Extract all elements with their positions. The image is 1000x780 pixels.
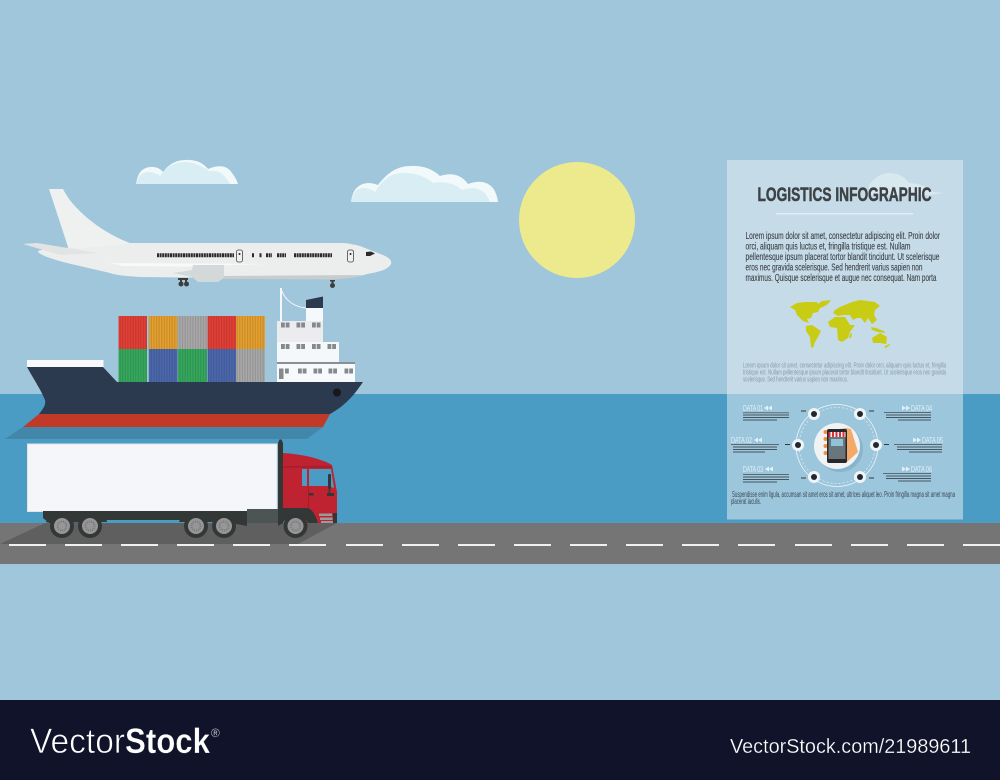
cabin windows: [281, 325, 353, 371]
airplane: [23, 189, 391, 288]
hand: [827, 428, 858, 463]
data 02: [731, 435, 779, 452]
title: LOGISTICS INFOGRAPHIC: [758, 184, 932, 206]
cab lower: [278, 508, 318, 526]
mirror: [309, 474, 334, 496]
data 01: DATA 01: [743, 403, 763, 413]
sea: [0, 394, 1000, 524]
engine: [173, 265, 224, 282]
second paragraph: [743, 362, 946, 384]
rear landing gear: [178, 278, 189, 286]
tail fin: [49, 189, 140, 255]
data 03: DATA 03: [743, 464, 763, 474]
node: [808, 408, 820, 420]
container top row: [118, 316, 265, 349]
node: [808, 471, 820, 483]
data 05: [894, 435, 943, 452]
truck: [28, 440, 337, 538]
panel background lower: [727, 394, 963, 520]
porthole: [333, 388, 341, 396]
funnel: [306, 296, 323, 308]
cab windows: [302, 469, 334, 488]
nodes: [792, 408, 882, 483]
door rear: [236, 250, 242, 262]
footer logo: vector: Vector: [30, 722, 125, 761]
chassis: [43, 511, 247, 526]
phone: [827, 429, 847, 463]
node: [854, 408, 866, 420]
mast: [281, 288, 306, 321]
node: [870, 439, 882, 451]
containers: [118, 316, 265, 382]
cockpit window: [366, 252, 375, 256]
intro paragraph: [746, 230, 940, 284]
belly shade: [217, 275, 363, 280]
door line: [307, 487, 310, 510]
node: [792, 439, 804, 451]
circular diagram: [785, 404, 889, 486]
footer id: VectorStock.com/21989611: [730, 736, 971, 758]
truck shadow: [0, 523, 337, 544]
footer bar: [0, 700, 1000, 780]
front landing gear: [330, 280, 335, 288]
data 03: [743, 464, 789, 482]
wheel 5: [284, 514, 308, 538]
data 06: DATA 06: [911, 464, 932, 474]
ship shadow on water: [5, 427, 323, 439]
panel: logistics infographic: [727, 160, 963, 520]
data 04: [884, 403, 932, 420]
road: [0, 523, 1000, 564]
cloud: small: [136, 160, 238, 184]
node: [854, 471, 866, 483]
data 02: DATA 02: [731, 435, 752, 445]
data labels: [731, 403, 943, 482]
wheels: [46, 513, 308, 538]
bow deck: [27, 360, 104, 367]
superstructure: [277, 308, 355, 382]
door front: [348, 250, 354, 262]
data 06: [883, 464, 932, 482]
world map: [790, 300, 890, 348]
windows mid: [252, 253, 332, 257]
wheel 3: [184, 514, 208, 538]
cab: [283, 453, 337, 523]
storage box: [247, 509, 278, 523]
cab roof line: [283, 466, 332, 468]
wheel arches: [46, 513, 107, 523]
awning: [828, 432, 846, 437]
footer logo: [30, 722, 220, 761]
disc shadow: [817, 426, 863, 472]
container bottom row: [118, 349, 265, 382]
windows rear: [157, 253, 234, 257]
ring: [796, 404, 878, 486]
road dashes: [9, 544, 1000, 546]
fingers: [824, 430, 828, 455]
wheel 2: [78, 514, 102, 538]
closing paragraph: placerat iaculis.: [731, 497, 761, 506]
bumper: [333, 513, 337, 523]
data 04: DATA 04: [911, 403, 932, 413]
shop window: [831, 439, 843, 446]
data 01: [743, 403, 789, 420]
ship: [5, 288, 363, 439]
hull: [27, 367, 363, 414]
closing paragraph: [731, 490, 955, 506]
data 05: DATA 05: [922, 435, 943, 445]
footer logo: stock: Stock: [125, 722, 210, 761]
title underline: [776, 213, 913, 214]
second paragraph: scelerisque. Sed hendrerit varius sapien non maximus.: [743, 376, 848, 384]
cargo box: [28, 444, 277, 512]
cloud: large: [351, 166, 498, 202]
wing: [110, 263, 267, 266]
wheel 1: [50, 514, 74, 538]
connector ticks: [785, 410, 889, 478]
wheel 4: [212, 514, 236, 538]
panel background upper: [727, 160, 963, 394]
sun: [519, 162, 635, 278]
exhaust pipe: [278, 440, 283, 510]
center disc: [814, 423, 860, 469]
grille: [319, 514, 333, 523]
panel cloud: [869, 173, 944, 195]
horizontal stabilizer: [23, 243, 98, 255]
registered mark: ®: [211, 726, 220, 740]
fuselage: [38, 243, 391, 279]
hull red stripe: [23, 414, 330, 427]
intro paragraph: orci, aliquam quis luctus et, fringilla tristique est. Nullam: [746, 240, 911, 252]
